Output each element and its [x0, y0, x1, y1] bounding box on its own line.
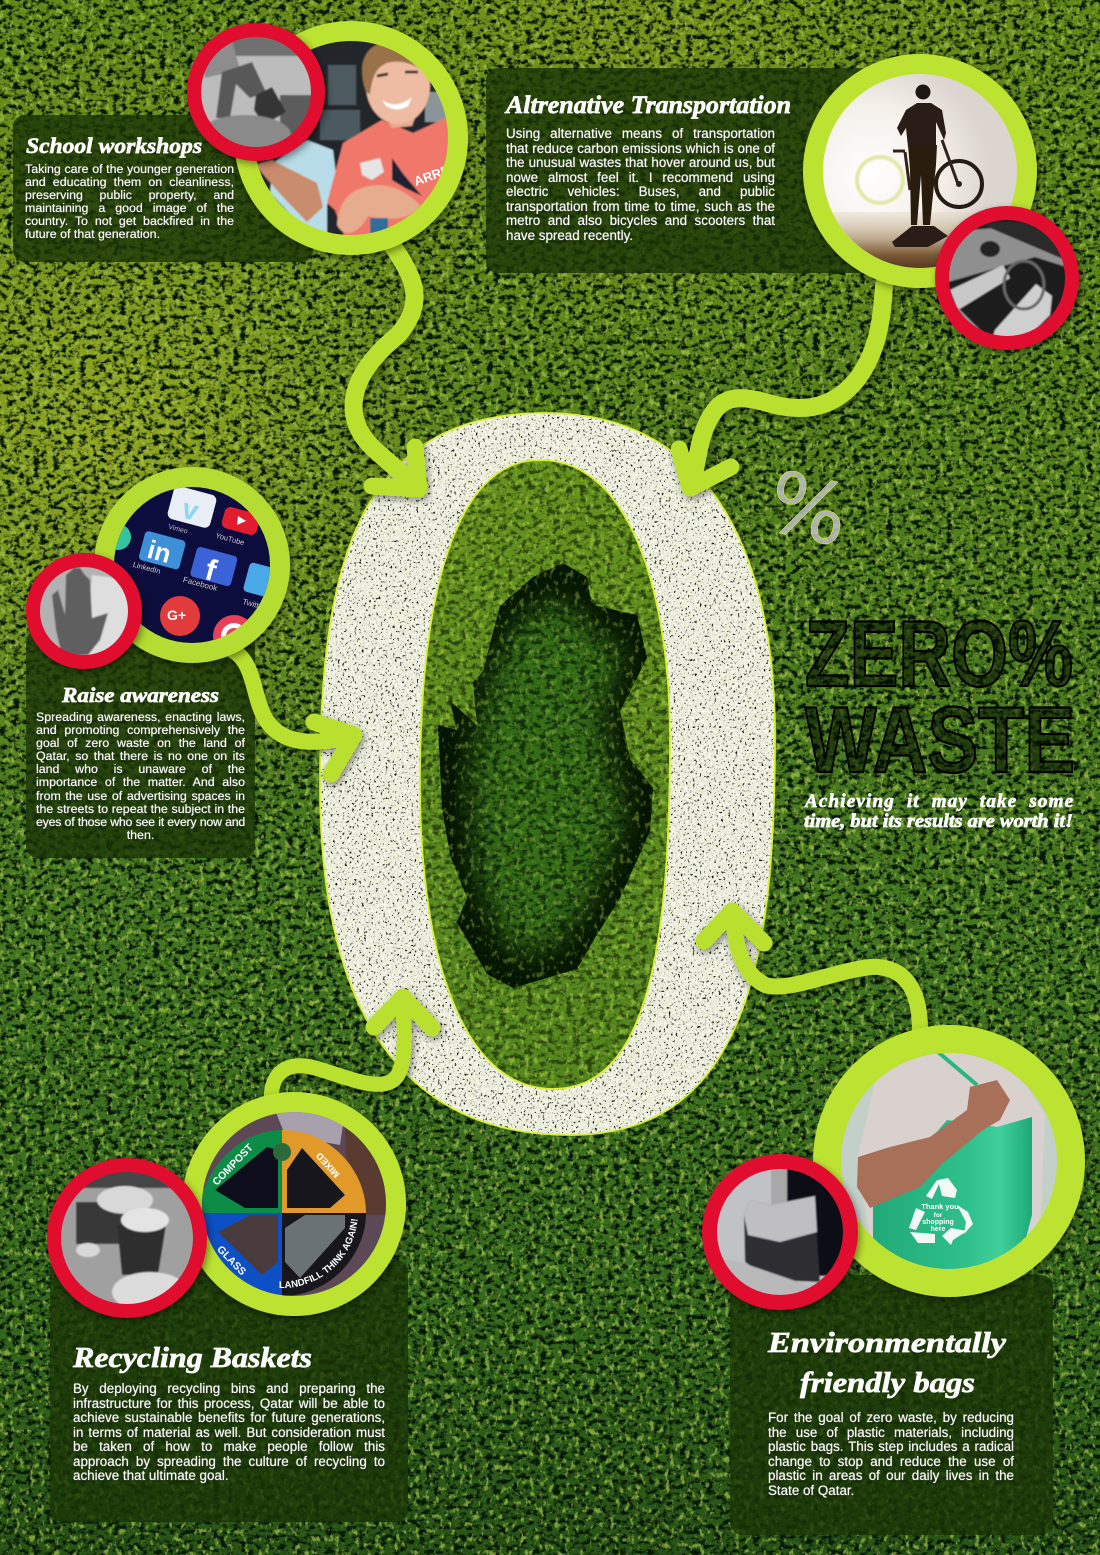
text: alternative transportation body: Using alternative means of transportation	[506, 126, 775, 141]
percent sign painted on grass: %	[758, 452, 859, 566]
text: friendly bags body: plastic in areas of our daily lives in the	[768, 1468, 1014, 1483]
photo circle: social media icons: Vimeo	[167, 524, 188, 536]
text: alternative transportation body: transportation from time to time, such as the	[506, 198, 775, 214]
photo circle: social media icons: G+	[167, 607, 186, 623]
text: recycling baskets body: achieve that ultimate goal.	[73, 1468, 229, 1483]
text: recycling baskets body	[73, 1381, 386, 1484]
text: recycling baskets body: be taken of how to make people follow this	[73, 1439, 385, 1454]
heading: raise awareness: Raise awareness	[61, 683, 219, 707]
text: school workshops body	[24, 162, 234, 242]
text: friendly bags body: State of Qatar.	[768, 1482, 854, 1498]
text: friendly bags body: plastic bags. This step includes a radical	[768, 1439, 1014, 1454]
text: alternative transportation body: that reduce carbon emissions which is one of	[506, 140, 775, 156]
heading: environmentally friendly bags: friendly bags	[800, 1367, 975, 1399]
heading: alternative transportation: Altrenative Transportation	[504, 92, 791, 119]
photo circle: social media icons: in	[144, 534, 174, 569]
photo circle: recycling bin lid: LANDFILL THINK AGAIN!	[280, 1219, 358, 1288]
text: friendly bags body: the use of plastic materials, including	[768, 1424, 1014, 1440]
text: school workshops body: preserving public property, and	[25, 188, 234, 202]
text: friendly bags body: For the goal of zero waste, by reducing	[768, 1410, 1014, 1425]
text: alternative transportation body: metro and also bicycles and scooters that	[506, 213, 775, 228]
arrow: alternative transportation to zero	[679, 285, 884, 488]
photo circle: cyclist at sunset	[803, 54, 1037, 288]
panel: environmentally friendly bags	[730, 1275, 1053, 1535]
text: raise awareness body: from the use of advertising spaces in	[36, 789, 245, 803]
large painted zero	[310, 405, 785, 1145]
text: recycling baskets body: approach by spreading the culture of recycling to	[73, 1454, 385, 1468]
photo circle: reusable shopping bag	[813, 1025, 1085, 1297]
photo circle: reusable shopping bag: shopping	[922, 1219, 954, 1226]
arrow: recycling baskets to zero	[271, 997, 432, 1105]
text: school workshops body: maintaining a good image of the	[25, 201, 234, 215]
photo circle: recycling bin lid: GLASS	[214, 1244, 248, 1278]
text: alternative transportation body: the unusual wastes that hover around us, but	[506, 155, 775, 170]
text: recycling baskets body: infrastructure for this process, Qatar will be able to	[73, 1396, 385, 1410]
heading: environmentally friendly bags: Environmentally	[767, 1327, 1006, 1359]
photo circle: plastic garbage bag	[702, 1154, 858, 1310]
text: alternative transportation body: electric vehicles: Buses, and public	[506, 184, 775, 199]
text: friendly bags body: change to stop and reduce the use of	[768, 1454, 1014, 1468]
heading: school workshops: School workshops	[26, 133, 202, 158]
text: school workshops body: future of that generation.	[25, 227, 160, 241]
photo circle: social media icons: LinkedIn	[132, 560, 162, 576]
photo circle: reusable shopping bag: for	[934, 1212, 943, 1219]
Qatar map cut into the grass	[430, 555, 660, 995]
photo circle: recycling bin lid: MIXED	[314, 1150, 343, 1180]
text: raise awareness body: Qatar, so that there is no one on its	[36, 749, 245, 763]
headline: zero% waste	[805, 601, 1075, 792]
photo circle: recycling bin lid: COMPOST	[210, 1141, 256, 1188]
text: raise awareness body: Spreading awareness, enacting laws,	[36, 710, 245, 724]
photo circle: boy in workshop: ARRR	[412, 162, 453, 189]
text: recycling baskets body: By deploying recycling bins and preparing the	[73, 1381, 385, 1396]
panel: school workshops	[13, 115, 313, 262]
photo circle: social media icons: v	[179, 493, 202, 527]
text: school workshops body: and educating them on cleanliness,	[25, 175, 234, 189]
photo circle: reusable shopping bag: Thank you	[921, 1202, 959, 1211]
text: recycling baskets body: in terms of material as well. But consideration must	[73, 1424, 385, 1440]
tagline	[804, 791, 1074, 832]
photo circle: boy in workshop	[234, 21, 468, 255]
text: raise awareness body: eyes of those who see it every now and	[36, 815, 245, 829]
heading: recycling baskets: Recycling Baskets	[72, 1342, 312, 1374]
photo circle: social media icons: Twitter	[241, 597, 267, 612]
panel: alternative transportation	[486, 68, 871, 273]
text: recycling baskets body: achieve sustainable benefits for future generations,	[73, 1410, 385, 1425]
tagline: Achieving it may take some	[804, 791, 1074, 812]
text: raise awareness body: then.	[127, 828, 154, 842]
photo circle: social media icons: Facebook	[182, 575, 219, 593]
text: raise awareness body	[36, 710, 246, 842]
photo circle: social media icons: YouTube	[215, 531, 245, 547]
text: raise awareness body: land who is unaware of the	[36, 762, 245, 776]
panel: recycling baskets	[50, 1260, 408, 1522]
photo circle: social media icons	[94, 467, 290, 663]
photo circle: boots in rubble	[187, 23, 325, 161]
arrow: school workshops to zero	[354, 245, 419, 489]
text: raise awareness body: goal of zero waste on the land of	[36, 736, 245, 750]
arrow: raise awareness to zero	[232, 650, 354, 774]
text: raise awareness body: and promoting comprehensively the	[36, 723, 245, 737]
photo circle: reusable shopping bag: here	[931, 1226, 945, 1233]
text: alternative transportation body	[506, 126, 776, 244]
panel: raise awareness	[26, 630, 255, 858]
photo circle: overflowing bins	[47, 1158, 207, 1318]
photo circle: social media icons: f	[202, 554, 221, 588]
arrow: friendly bags to zero	[704, 911, 920, 1030]
photo circle: recycling bin lid	[184, 1090, 412, 1322]
tagline: time, but its results are worth it!	[804, 811, 1073, 832]
heading: environmentally friendly bags	[767, 1327, 1006, 1399]
photo circle: raised hand	[26, 553, 142, 669]
photo circle: hands on steering wheel	[935, 206, 1079, 350]
text: raise awareness body: the streets to repeat the subject in the	[36, 802, 245, 816]
text: raise awareness body: importance of the matter. And also	[36, 775, 245, 789]
text: friendly bags body	[768, 1410, 1014, 1499]
text: school workshops body: country. To not get backfired in the	[25, 214, 234, 228]
text: alternative transportation body: have spread recently.	[506, 228, 633, 242]
text: school workshops body: Taking care of the younger generation	[25, 162, 234, 176]
text: alternative transportation body: nowe almost feel it. I recommend using	[506, 170, 775, 184]
